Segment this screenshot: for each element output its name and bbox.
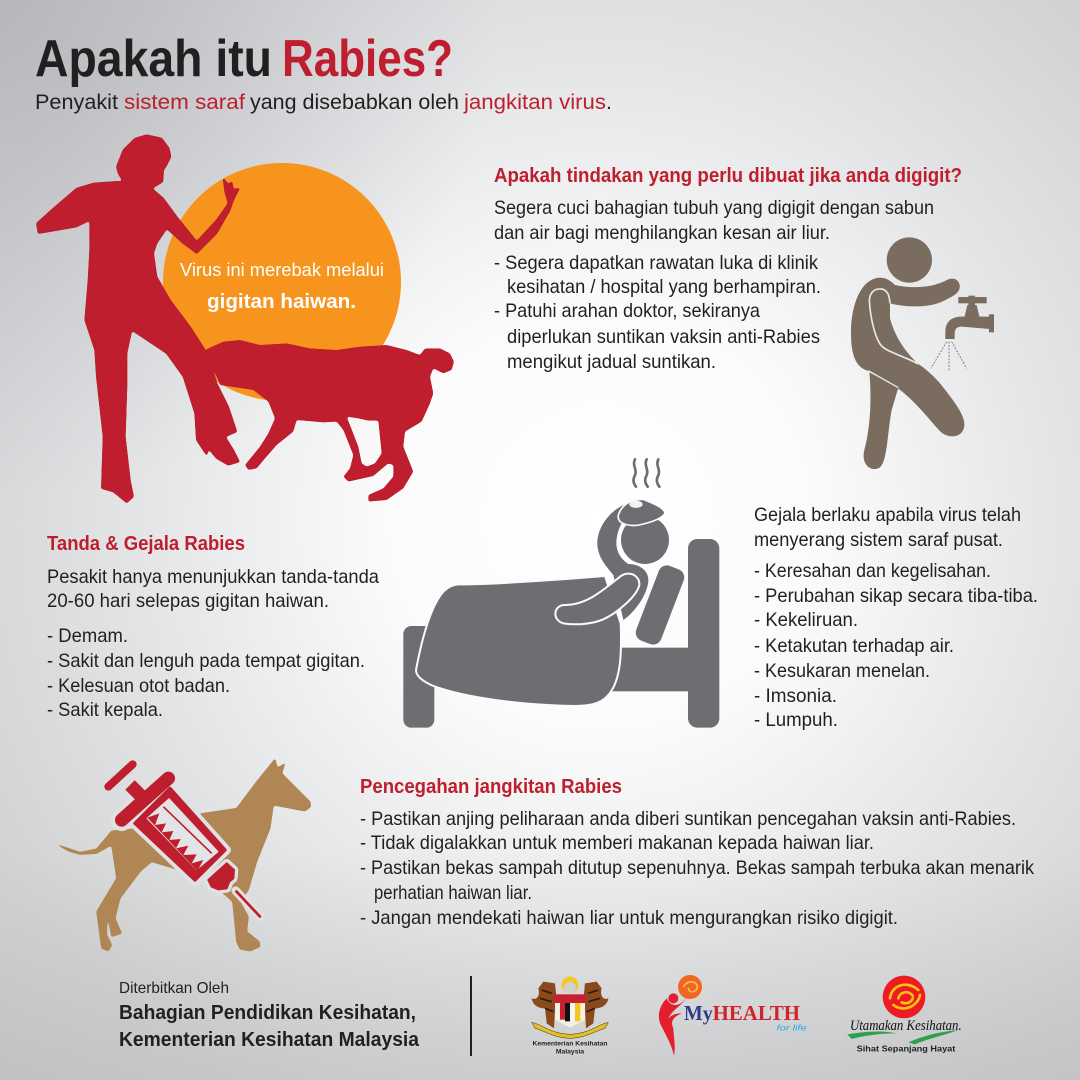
publisher credit: Bahagian Pendidikan Kesihatan, xyxy=(119,1002,416,1024)
section: prevention xyxy=(360,776,1034,929)
section: what to do if bitten xyxy=(494,165,962,373)
arm xyxy=(555,574,639,624)
cold compress xyxy=(618,499,665,525)
dog silhouette xyxy=(205,340,454,502)
dog xyxy=(57,759,311,951)
section: what to do if bitten: dan air bagi menghilangkan kesan air liur. xyxy=(494,222,830,244)
section: prevention: - Tidak digalakkan untuk memberi makanan kepada haiwan liar. xyxy=(360,832,874,854)
logo: Kementerian Kesihatan Malaysia xyxy=(532,977,608,1056)
logo: Utamakan Kesihatan xyxy=(847,976,962,1053)
section: prevention: perhatian haiwan liar. xyxy=(374,882,532,904)
section: symptoms list: menyerang sistem saraf pusat. xyxy=(754,529,1003,551)
icon: tap xyxy=(945,296,994,339)
section: signs and symptoms: - Demam. xyxy=(47,625,128,647)
logo: MyHEALTH for life: My xyxy=(684,1003,713,1025)
section: prevention: - Pastikan anjing peliharaan anda diberi suntikan pencegahan vaksin anti-Rabies. xyxy=(360,808,1016,830)
title: Rabies? xyxy=(282,30,453,88)
section: what to do if bitten: Apakah tindakan yang perlu dibuat jika anda digigit? xyxy=(494,165,962,187)
logo: Utamakan Kesihatan: Utamakan Kesihatan. xyxy=(850,1018,962,1034)
section: signs and symptoms: Pesakit hanya menunjukkan tanda-tanda xyxy=(47,566,379,588)
bed frame xyxy=(403,539,719,728)
section: what to do if bitten: - Segera dapatkan rawatan luka di klinik xyxy=(494,252,818,274)
section: symptoms list: - Lumpuh. xyxy=(754,709,838,731)
head xyxy=(621,516,669,564)
orange caption: Virus ini merebak melalui xyxy=(180,260,384,280)
icon: water spray xyxy=(931,342,967,372)
orange caption xyxy=(180,260,384,313)
section: signs and symptoms xyxy=(47,533,379,721)
section: prevention: - Pastikan bekas sampah ditutup sepenuhnya. Bekas sampah terbuka akan menarik xyxy=(360,857,1034,879)
section: symptoms list: - Kekeliruan. xyxy=(754,609,858,631)
illustration: woman bitten by dog xyxy=(37,135,454,503)
section: what to do if bitten: kesihatan / hospital yang berhampiran. xyxy=(507,276,821,298)
blanket xyxy=(416,576,621,706)
woman silhouette xyxy=(37,135,239,503)
heat waves xyxy=(633,459,659,487)
section: what to do if bitten: - Patuhi arahan doktor, sekiranya xyxy=(494,300,760,322)
subtitle: jangkitan virus xyxy=(463,91,606,114)
section: symptoms list xyxy=(754,504,1038,731)
backrest pillow xyxy=(633,563,687,647)
section: prevention: - Jangan mendekati haiwan liar untuk mengurangkan risiko digigit. xyxy=(360,907,898,929)
section: symptoms list: - Imsonia. xyxy=(754,685,837,707)
publisher credit: Diterbitkan Oleh xyxy=(119,980,229,997)
section: signs and symptoms: - Sakit kepala. xyxy=(47,699,163,721)
publisher credit xyxy=(119,980,420,1051)
orange caption: gigitan haiwan. xyxy=(207,291,356,313)
logo: MyHEALTH for life xyxy=(659,975,807,1056)
section: symptoms list: - Ketakutan terhadap air. xyxy=(754,635,954,657)
footer divider xyxy=(470,976,472,1056)
body and back xyxy=(597,505,648,620)
section: symptoms list: - Keresahan dan kegelisahan. xyxy=(754,560,991,582)
section: what to do if bitten: diperlukan suntikan vaksin anti-Rabies xyxy=(507,326,820,348)
publisher credit: Kementerian Kesihatan Malaysia xyxy=(119,1029,420,1051)
icon: dog with syringe xyxy=(57,759,311,951)
section: signs and symptoms: 20-60 hari selepas gigitan haiwan. xyxy=(47,590,329,612)
logo: Kementerian Kesihatan Malaysia: Kementerian Kesihatan xyxy=(532,1041,607,1048)
title: Apakah itu xyxy=(35,30,272,88)
section: what to do if bitten: Segera cuci bahagian tubuh yang digigit dengan sabun xyxy=(494,197,934,219)
orange circle xyxy=(163,163,401,401)
section: what to do if bitten: mengikut jadual suntikan. xyxy=(507,351,716,373)
section: symptoms list: - Kesukaran menelan. xyxy=(754,660,930,682)
title xyxy=(35,30,453,88)
logo: MyHEALTH for life: for life xyxy=(777,1023,807,1033)
icon: man washing wound at tap xyxy=(851,237,994,469)
subtitle: Penyakit xyxy=(35,91,118,114)
subtitle: sistem saraf xyxy=(124,91,245,114)
subtitle: yang disebabkan oleh xyxy=(250,91,459,114)
section: prevention: Pencegahan jangkitan Rabies xyxy=(360,776,622,798)
section: symptoms list: - Perubahan sikap secara tiba-tiba. xyxy=(754,585,1038,607)
syringe xyxy=(108,764,261,917)
logo: MyHEALTH for life: HEALTH xyxy=(713,1003,800,1025)
subtitle xyxy=(35,91,612,114)
section: symptoms list: Gejala berlaku apabila virus telah xyxy=(754,504,1021,526)
section: signs and symptoms: - Kelesuan otot badan. xyxy=(47,675,230,697)
section: signs and symptoms: - Sakit dan lenguh pada tempat gigitan. xyxy=(47,650,365,672)
subtitle: . xyxy=(606,91,612,114)
section: signs and symptoms: Tanda & Gejala Rabies xyxy=(47,533,245,555)
logo: Kementerian Kesihatan Malaysia: Malaysia xyxy=(556,1049,584,1056)
syringe halo xyxy=(122,778,261,917)
logo: Utamakan Kesihatan: Sihat Sepanjang Hayat xyxy=(857,1044,956,1053)
icon: sick person in bed xyxy=(403,459,719,728)
